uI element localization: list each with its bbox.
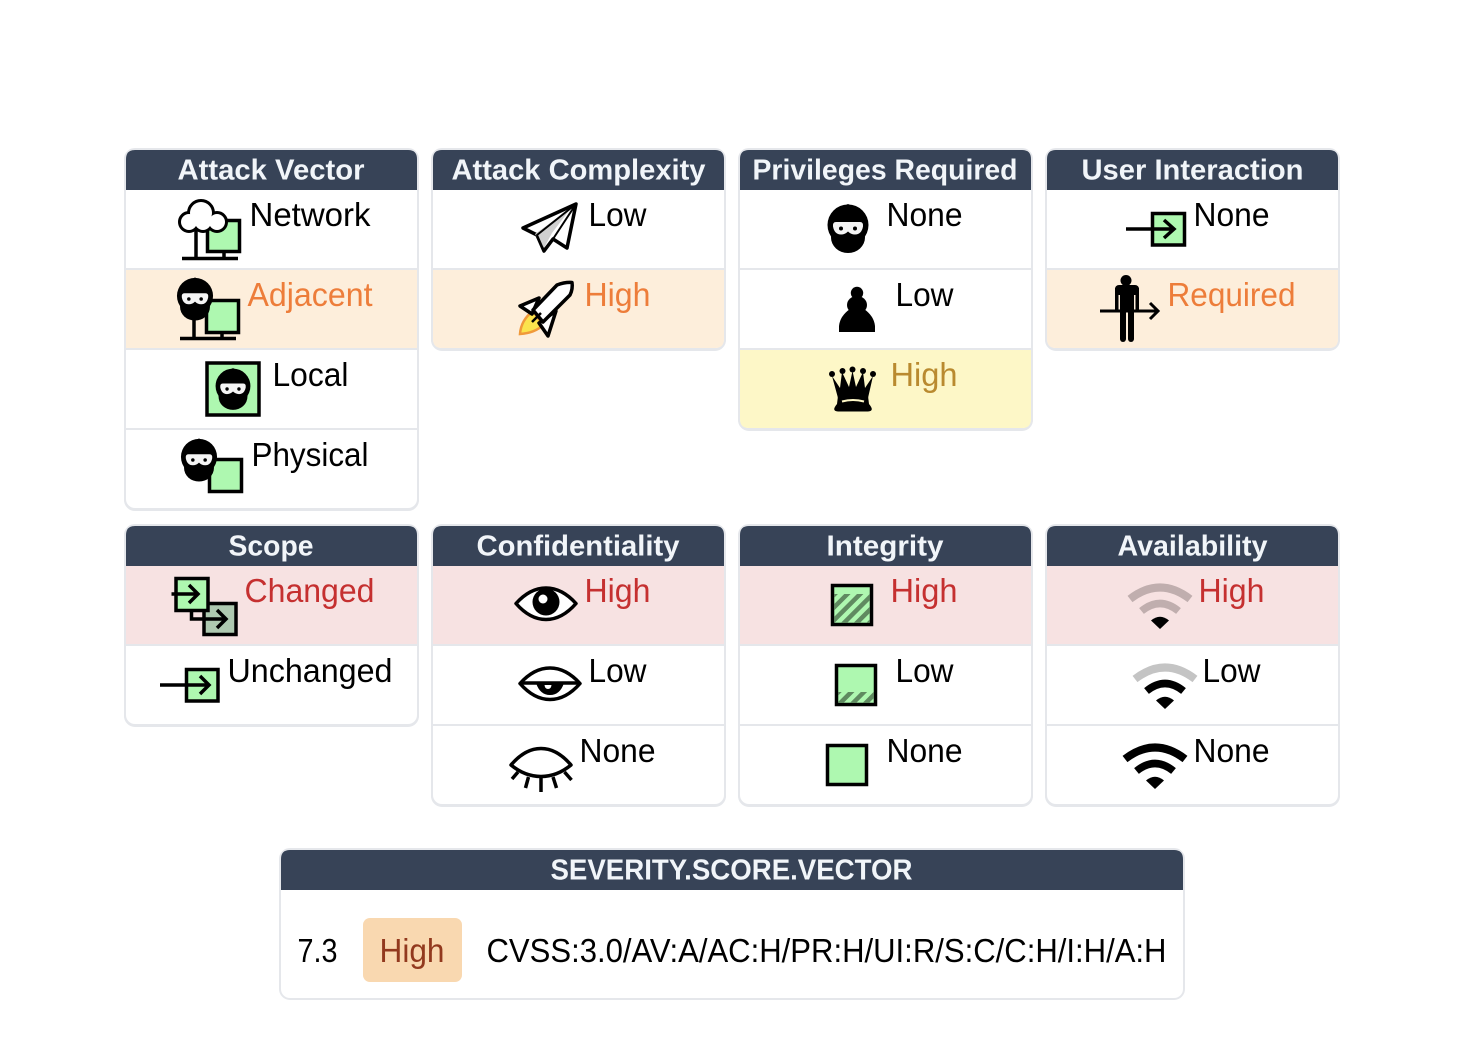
heading: Integrity [740, 526, 1031, 566]
panel: Availability [1046, 525, 1339, 806]
option: High [740, 566, 1031, 646]
option: None [511, 732, 656, 792]
heading: SEVERITY.SCORE.VECTOR [281, 850, 1183, 890]
option: High: High [584, 276, 650, 313]
option: None: None [886, 196, 962, 233]
heading: Scope [126, 526, 417, 566]
option: Low [433, 652, 724, 726]
heading: Confidentiality [433, 526, 724, 566]
option: Low: Low [588, 196, 647, 233]
option: High: High [890, 356, 958, 393]
panel: Privileges Required [739, 149, 1032, 430]
option: None: None [886, 732, 962, 769]
CVSS vector string: CVSS:3.0/AV:A/AC:H/PR:H/UI:R/S:C/C:H/I:H/A:H [486, 932, 1166, 969]
option: Low: Low [588, 652, 647, 689]
option: High: High [890, 572, 958, 609]
heading: Availability [1047, 526, 1338, 566]
option: Network [126, 196, 417, 270]
heading: Attack Vector: Attack Vector [178, 154, 364, 186]
option: Unchanged [160, 652, 392, 701]
option: Low: Low [896, 276, 954, 313]
heading: Scope: Scope [228, 530, 314, 562]
heading: Attack Complexity: Attack Complexity [452, 154, 706, 186]
heading: Attack Complexity [433, 150, 724, 190]
option: Changed: Changed [244, 572, 374, 609]
option: Physical: Physical [252, 436, 368, 473]
option: Low: Low [896, 652, 954, 689]
heading: Availability: Availability [1118, 530, 1268, 562]
option: Physical [181, 436, 368, 492]
severity badge: High [380, 932, 444, 969]
option: None: None [580, 732, 656, 769]
option: None [1125, 732, 1270, 789]
panel: User Interaction [1046, 149, 1339, 350]
option: Network: Network [250, 196, 371, 233]
option: Low: Low [1202, 652, 1261, 689]
option: Unchanged: Unchanged [228, 652, 392, 689]
option: Required: Required [1168, 276, 1296, 313]
heading: Attack Vector [126, 150, 417, 190]
heading: User Interaction: User Interaction [1082, 154, 1304, 186]
panel: Attack Vector [125, 149, 418, 510]
option: Low [433, 196, 724, 270]
option: Low [740, 276, 1031, 350]
score value: 7.3 [298, 932, 338, 969]
panel: Integrity [739, 525, 1032, 806]
severity badge [363, 918, 462, 982]
option: Required [1047, 270, 1338, 348]
option: High: High [1198, 572, 1264, 609]
option: None [1047, 196, 1338, 270]
heading: User Interaction [1047, 150, 1338, 190]
option: None: None [1194, 732, 1270, 769]
option: Local: Local [272, 356, 348, 393]
panel: Confidentiality [432, 525, 725, 806]
option: None [828, 732, 962, 784]
option: None: None [1194, 196, 1270, 233]
panel: Attack Complexity [432, 149, 725, 350]
panel: severity score vector [280, 849, 1184, 999]
option: High [1047, 566, 1338, 646]
option: Adjacent [126, 270, 417, 350]
option: Low [1047, 652, 1338, 726]
option: High [740, 350, 1031, 428]
heading: SEVERITY.SCORE.VECTOR: SEVERITY.SCORE.VECTOR [550, 854, 913, 886]
heading: Confidentiality: Confidentiality [476, 530, 680, 562]
option: None [740, 196, 1031, 270]
heading: Integrity: Integrity [826, 530, 944, 562]
option: High [433, 270, 724, 348]
option: Adjacent: Adjacent [248, 276, 372, 313]
option: Changed [126, 566, 417, 646]
heading: Privileges Required: Privileges Required [752, 154, 1018, 186]
option: High [433, 566, 724, 646]
option: Local [126, 356, 417, 430]
panel: Scope [125, 525, 418, 726]
option: Low [740, 652, 1031, 726]
option: High: High [584, 572, 650, 609]
